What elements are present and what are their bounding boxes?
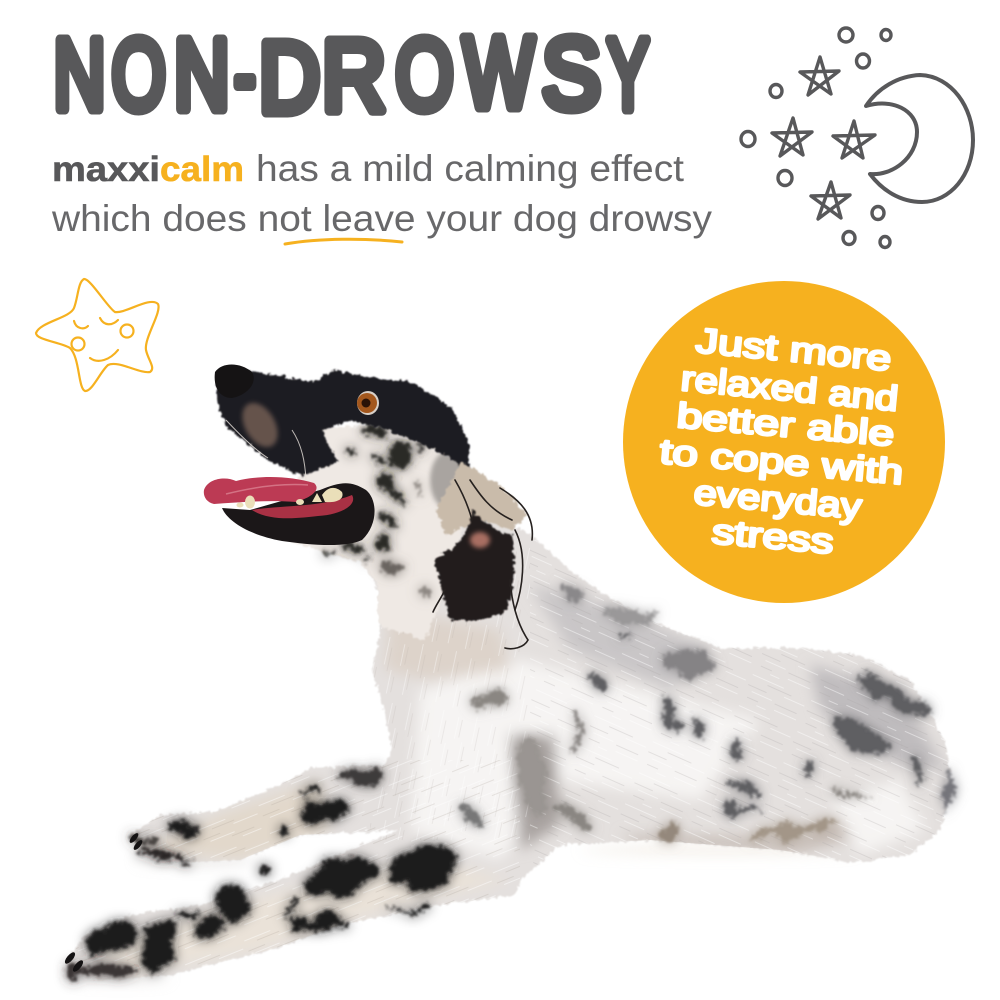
title: W: [463, 17, 534, 129]
dog photo illustration: [60, 364, 960, 985]
fur strokes: hind: [530, 540, 960, 870]
eye: [357, 391, 379, 415]
ear strands: [433, 480, 532, 649]
nose: [215, 364, 254, 398]
title: O: [112, 19, 166, 131]
title: N: [174, 19, 230, 131]
white face and neck: [285, 425, 470, 640]
subtitle line two: which does not leave your dog drowsy: [51, 198, 713, 239]
title: O: [396, 19, 454, 131]
title: D: [259, 22, 320, 134]
muzzle brown patch: [235, 397, 285, 453]
subtitle text block: [51, 148, 713, 239]
small circles: [741, 28, 891, 248]
subtitle line one: maxxi: [52, 150, 160, 189]
dog body silhouette: [65, 500, 952, 980]
moon: [866, 75, 973, 202]
callout text: better able: [675, 396, 896, 454]
grey fur behind cheek: [430, 450, 470, 510]
tongue: [204, 477, 317, 504]
icon: smiling star: [36, 279, 159, 391]
title: R: [322, 20, 386, 132]
title: [54, 17, 649, 134]
floor shadow: [70, 846, 860, 982]
underline accent: [285, 239, 402, 244]
whiskers: [226, 420, 306, 480]
callout text: [658, 321, 905, 562]
head spots: [322, 426, 435, 598]
title: S: [542, 18, 601, 130]
fur strokes: chest: [370, 540, 530, 840]
icon: moon and stars: [741, 28, 973, 248]
claws: [63, 832, 144, 973]
star outline: [36, 279, 159, 391]
title: Y: [607, 19, 649, 131]
subtitle line one: has a mild calming effect: [256, 148, 685, 189]
callout text: relaxed and: [679, 359, 900, 419]
grey body spots: [455, 582, 950, 843]
subtitle line one: calm: [160, 150, 244, 189]
callout text: everyday: [692, 473, 864, 527]
callout text: to cope with: [658, 432, 905, 492]
subtitle line one: [52, 148, 685, 189]
pink inner ear: [470, 532, 490, 548]
ear: [433, 462, 532, 649]
star outlines: [772, 57, 875, 219]
lower jaw: [222, 483, 375, 545]
body shading and fur: [60, 540, 960, 985]
callout text: Just more: [694, 321, 893, 379]
callout text: stress: [710, 512, 835, 562]
dog head: [204, 364, 532, 649]
star face: [74, 318, 118, 361]
teeth: [236, 488, 343, 508]
tongue highlight: [226, 485, 308, 494]
black cap and muzzle: [216, 366, 470, 476]
black leg spots: [69, 769, 458, 977]
mouth interior: [252, 495, 353, 518]
fur strokes: legs: [60, 760, 520, 985]
title: -: [234, 26, 255, 126]
title: N: [54, 19, 106, 131]
callout: yellow circle: [623, 281, 945, 603]
